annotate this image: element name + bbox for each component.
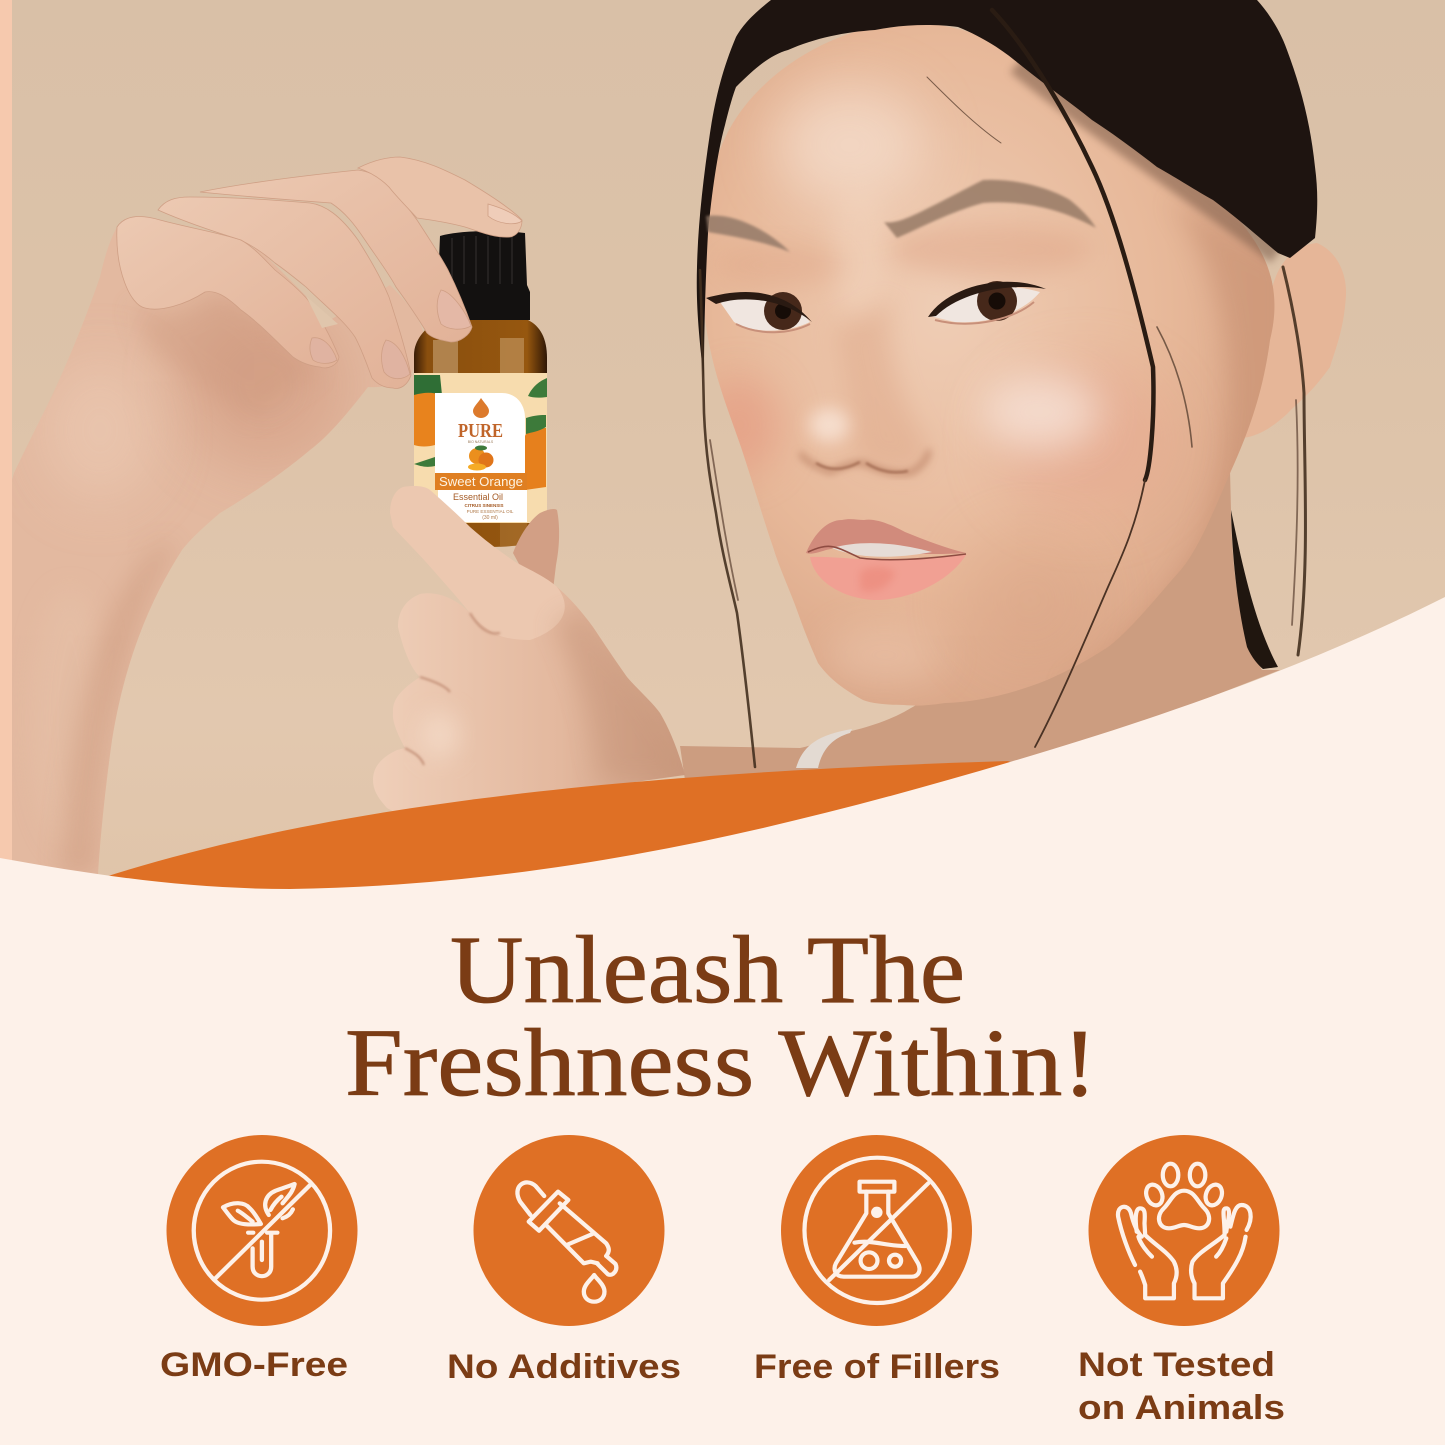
label: GMO-Free: GMO-Free (160, 1346, 348, 1384)
knuckle creases (405, 613, 500, 765)
gap between fingers (306, 296, 338, 328)
bottle cap (438, 231, 530, 320)
finger A (358, 157, 522, 237)
hairline fade (1018, 63, 1278, 253)
face (702, 22, 1274, 706)
back hair at neck (1231, 510, 1278, 669)
left eye (706, 292, 812, 332)
product bottle (414, 231, 547, 547)
right eyebrow (884, 180, 1096, 238)
label orange right (525, 428, 546, 490)
nail A (488, 204, 522, 224)
thumb (390, 486, 565, 640)
brand subtext: BIO NATURALS (468, 440, 494, 444)
lips (806, 519, 966, 600)
nail D (310, 338, 337, 363)
glass highlights (433, 340, 458, 373)
orange fruit illustration (468, 446, 494, 470)
label leaves (414, 375, 442, 395)
brand logo drop (473, 398, 489, 418)
finger C (158, 197, 411, 388)
hair (697, 0, 1317, 380)
title (345, 916, 1097, 1116)
label: Not Tested on Animals: on Animals (1078, 1389, 1285, 1427)
white label panel (435, 393, 525, 473)
amber glass (414, 320, 547, 547)
left accent strip (0, 0, 12, 870)
orange wave (105, 761, 1040, 900)
title: Freshness Within! (345, 1009, 1097, 1116)
left eyebrow (706, 215, 790, 252)
botanical caption: CITRUS SINENSIS (464, 503, 504, 508)
hand shading (422, 615, 655, 775)
facial shading and highlights (700, 85, 1290, 690)
nose (800, 300, 929, 473)
ear inner shadow (1245, 340, 1260, 385)
product name: Sweet Orange (439, 474, 523, 489)
product name band (435, 473, 527, 490)
label background (414, 373, 547, 523)
title: Unleash The (450, 916, 965, 1023)
cream content panel (0, 597, 1445, 1445)
finger B (200, 170, 472, 342)
upper hand: fingers (117, 157, 522, 388)
icon: free of fillers flask (781, 1135, 972, 1326)
brand name: PURE (458, 420, 503, 442)
back of hand and knuckles (373, 587, 685, 815)
label: Not Tested on Animals: Not Tested (1078, 1346, 1275, 1384)
label: Free of Fillers: Free of Fillers (754, 1348, 1000, 1386)
label: No Additives: No Additives (447, 1348, 681, 1386)
lower hand (373, 486, 690, 815)
icon: no additives dropper (474, 1135, 664, 1326)
right eye (928, 281, 1046, 324)
label: Not Tested on Animals (1078, 1346, 1285, 1427)
product bottle: PURE ESSENTIAL OIL (467, 509, 514, 514)
nail C (382, 340, 410, 379)
dress strap (796, 729, 852, 768)
hair strands (700, 10, 1306, 767)
raised finger (513, 509, 559, 590)
neck and shoulder (680, 470, 1280, 780)
essential oil caption: Essential Oil (453, 492, 503, 503)
icon: GMO-free (166, 1135, 358, 1326)
icon: not tested on animals (1088, 1135, 1280, 1326)
ear (1228, 243, 1346, 438)
upper hand: palm and wrist (12, 217, 424, 875)
label orange left (414, 392, 435, 446)
photo panel: model holding bottle (0, 0, 1445, 900)
lower white label (438, 490, 527, 522)
nail B (437, 290, 471, 329)
product bottle: (30 ml) (482, 515, 498, 521)
finger D (117, 216, 339, 368)
